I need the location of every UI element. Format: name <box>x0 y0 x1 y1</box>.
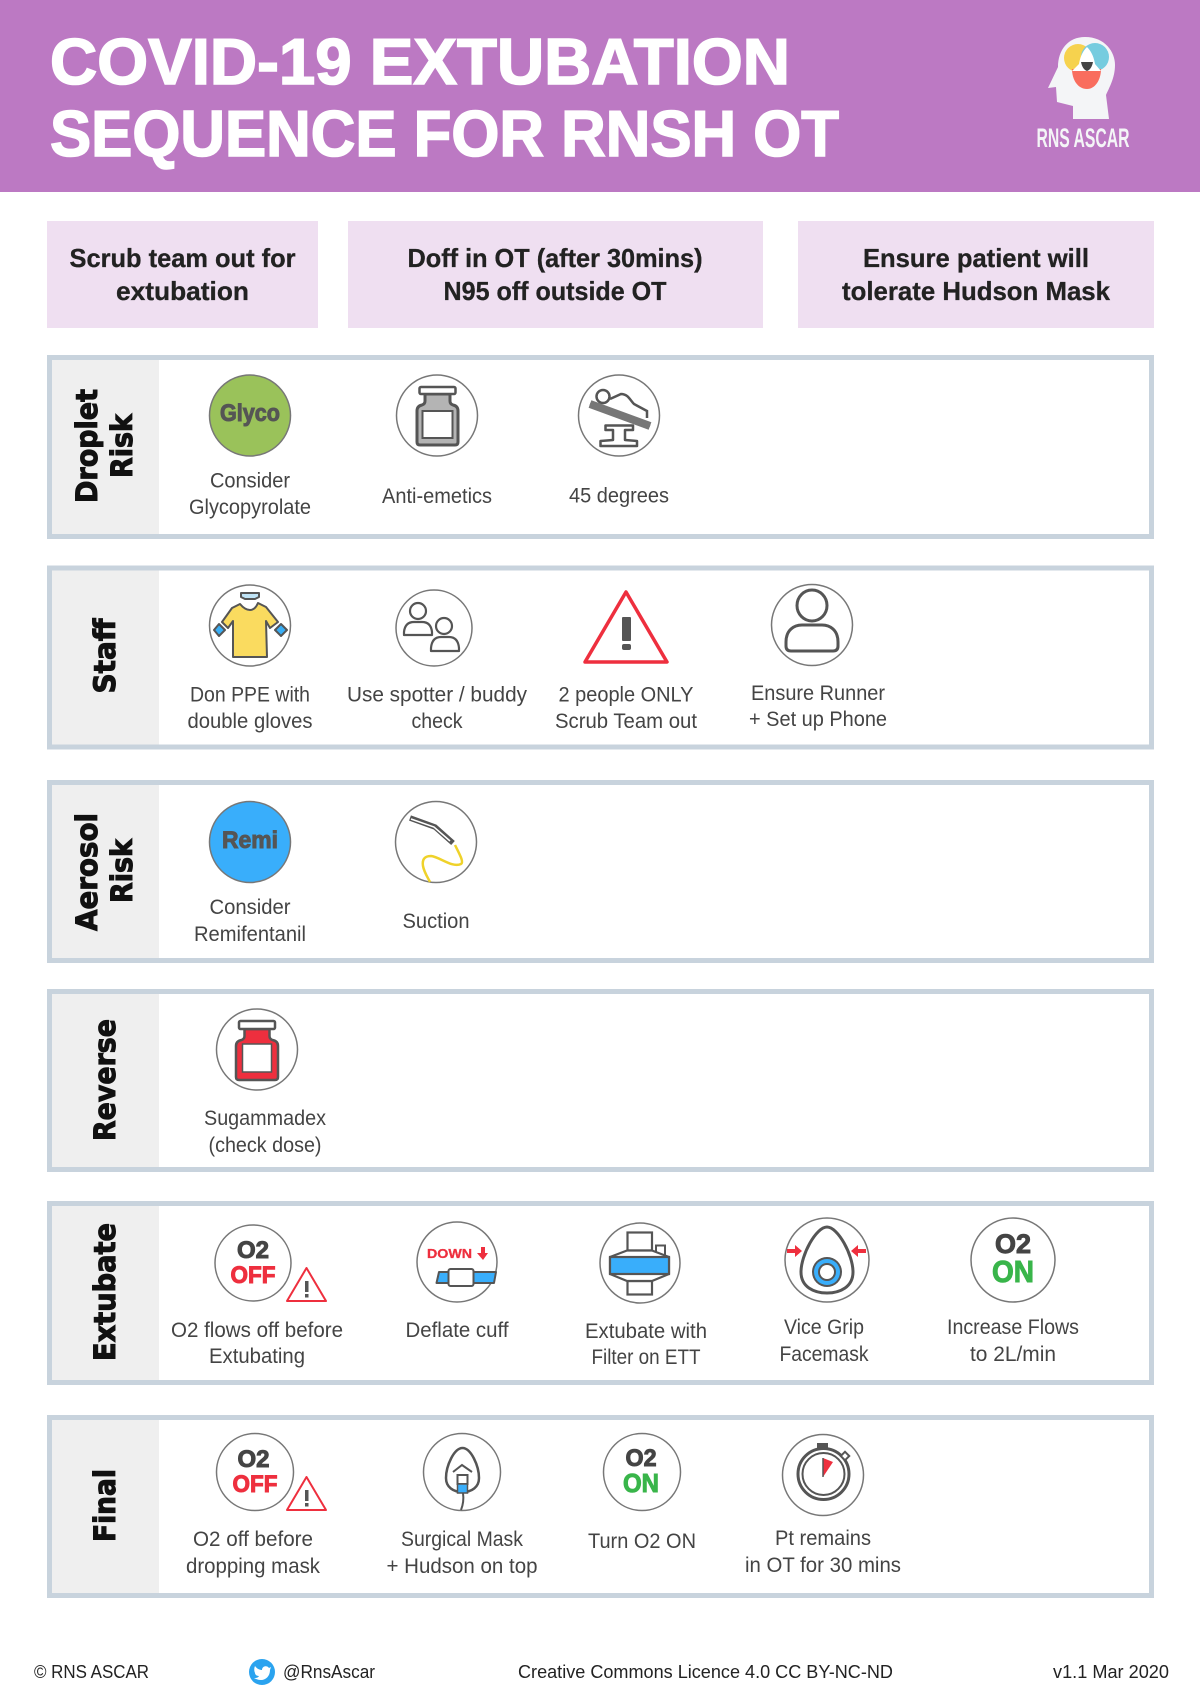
item: spotter: Use spotter / buddy <box>347 684 527 706</box>
version: v1.1 Mar 2020 <box>1053 1662 1169 1682</box>
item: O2 off before dropping mask: OFF <box>232 1471 278 1498</box>
item: anti-emetics <box>382 375 492 508</box>
item: consider glycopyrrolate: Glyco <box>220 400 280 427</box>
item: increase flows: to 2L/min <box>970 1343 1056 1366</box>
callout: scrub team: Scrub team out for <box>70 243 296 273</box>
copyright: © RNS ASCAR <box>34 1662 149 1682</box>
item: O2 flows off: Extubating <box>209 1345 305 1368</box>
item: sugammadex: (check dose) <box>208 1134 322 1157</box>
item: 45 degrees: 45 degrees <box>569 484 669 508</box>
item: vice grip facemask: Facemask <box>780 1343 869 1366</box>
callout: doffing: Doff in OT (after 30mins) <box>408 243 702 273</box>
item: deflate cuff: DOWN <box>427 1246 472 1261</box>
row label: final: Final <box>88 1469 122 1542</box>
row label: aerosol risk: Risk <box>105 838 139 903</box>
item: sugammadex <box>204 1009 326 1157</box>
item: turn O2 on <box>588 1434 696 1553</box>
item: vice grip facemask <box>780 1218 869 1366</box>
item: deflate cuff <box>406 1222 509 1342</box>
item: O2 flows off: O2 <box>237 1237 269 1264</box>
item: consider remifentanil: Remifentanil <box>194 923 306 946</box>
item: O2 off before dropping mask: O2 off before <box>193 1528 313 1551</box>
item: timer 30 mins: in OT for 30 mins <box>745 1554 901 1577</box>
item: turn O2 on: Turn O2 ON <box>588 1530 696 1553</box>
item: suction: Suction <box>402 910 470 933</box>
row label: staff: Staff <box>88 618 122 694</box>
twitter handle with bird icon: @RnsAscar <box>283 1662 375 1682</box>
item: O2 off before dropping mask: O2 <box>238 1446 270 1473</box>
item: spotter <box>347 590 527 733</box>
item: sugammadex: Sugammadex <box>204 1107 326 1130</box>
item: don PPE: double gloves <box>188 710 312 733</box>
item: 2 people only: Scrub Team out <box>555 710 697 733</box>
panel: final <box>50 1418 1152 1596</box>
item: don PPE: Don PPE with <box>190 684 310 706</box>
item: O2 flows off: OFF <box>230 1262 276 1289</box>
item: consider glycopyrrolate: Glycopyrolate <box>189 496 311 519</box>
item: extubate with filter: Extubate with <box>585 1320 707 1343</box>
header banner <box>0 0 1200 192</box>
callout: doffing <box>348 221 763 328</box>
item: suction <box>396 802 476 933</box>
item: surgical mask and Hudson: Surgical Mask <box>401 1528 523 1551</box>
panel: extubate <box>50 1204 1152 1382</box>
title: SEQUENCE FOR RNSH OT <box>50 97 839 170</box>
item: O2 off before dropping mask: dropping mask <box>186 1555 320 1578</box>
item: vice grip facemask: Vice Grip <box>784 1316 864 1339</box>
item: turn O2 on: ON <box>623 1468 659 1498</box>
item: consider remifentanil <box>194 802 306 946</box>
callout: scrub team: extubation <box>116 276 249 306</box>
title <box>50 25 839 170</box>
panel: droplet risk <box>50 358 1152 536</box>
item: increase flows: ON <box>992 1254 1034 1289</box>
row label: extubate: Extubate <box>88 1223 122 1361</box>
item: deflate cuff: Deflate cuff <box>406 1319 509 1342</box>
item: 2 people only <box>555 592 697 733</box>
item: consider remifentanil: Consider <box>210 896 291 919</box>
item: turn O2 on: O2 <box>626 1445 656 1472</box>
item: don PPE <box>188 585 312 733</box>
item: runner <box>749 584 887 731</box>
item: O2 flows off: O2 flows off before <box>171 1319 343 1342</box>
footer <box>34 1659 1169 1685</box>
item: consider remifentanil: Remi <box>222 827 278 854</box>
item: consider glycopyrrolate: Consider <box>210 470 290 492</box>
item: 2 people only: 2 people ONLY <box>558 684 694 706</box>
item: increase flows: Increase Flows <box>947 1316 1079 1339</box>
item: runner: + Set up Phone <box>749 708 887 731</box>
row label: aerosol risk <box>70 813 139 931</box>
panel: staff <box>50 568 1152 747</box>
callout: doffing: N95 off outside OT <box>444 276 667 306</box>
item: O2 off before dropping mask <box>186 1434 326 1578</box>
callout: Hudson mask <box>798 221 1154 328</box>
item: consider glycopyrrolate <box>189 375 311 519</box>
logo: RNS ASCAR head: RNS ASCAR <box>1036 123 1130 153</box>
twitter handle with bird icon <box>249 1659 375 1685</box>
item: extubate with filter <box>585 1223 707 1369</box>
item: 45 degrees <box>569 375 669 508</box>
callout: Hudson mask: tolerate Hudson Mask <box>842 276 1111 306</box>
item: spotter: check <box>412 710 463 733</box>
item: timer 30 mins <box>745 1434 901 1577</box>
callout: scrub team <box>47 221 318 328</box>
logo: RNS ASCAR head <box>1036 37 1130 153</box>
item: anti-emetics: Anti-emetics <box>382 485 492 508</box>
item: runner: Ensure Runner <box>751 682 885 705</box>
callout: Hudson mask: Ensure patient will <box>863 243 1089 273</box>
title: COVID-19 EXTUBATION <box>50 25 790 98</box>
item: extubate with filter: Filter on ETT <box>592 1346 701 1369</box>
row label: droplet risk: Risk <box>105 413 139 478</box>
row label: droplet risk <box>70 389 139 503</box>
item: surgical mask and Hudson: + Hudson on top <box>386 1555 538 1578</box>
row label: aerosol risk: Aerosol <box>70 813 104 931</box>
item: O2 flows off <box>171 1225 343 1368</box>
item: increase flows: O2 <box>995 1229 1031 1259</box>
panel: aerosol risk <box>50 782 1152 960</box>
row label: droplet risk: Droplet <box>70 389 104 503</box>
item: timer 30 mins: Pt remains <box>775 1527 871 1550</box>
item: surgical mask and Hudson <box>386 1434 538 1578</box>
licence: Creative Commons Licence 4.0 CC BY-NC-ND <box>518 1662 893 1682</box>
item: increase flows <box>947 1218 1079 1366</box>
panel: reverse <box>50 992 1152 1170</box>
row label: reverse: Reverse <box>88 1019 122 1141</box>
